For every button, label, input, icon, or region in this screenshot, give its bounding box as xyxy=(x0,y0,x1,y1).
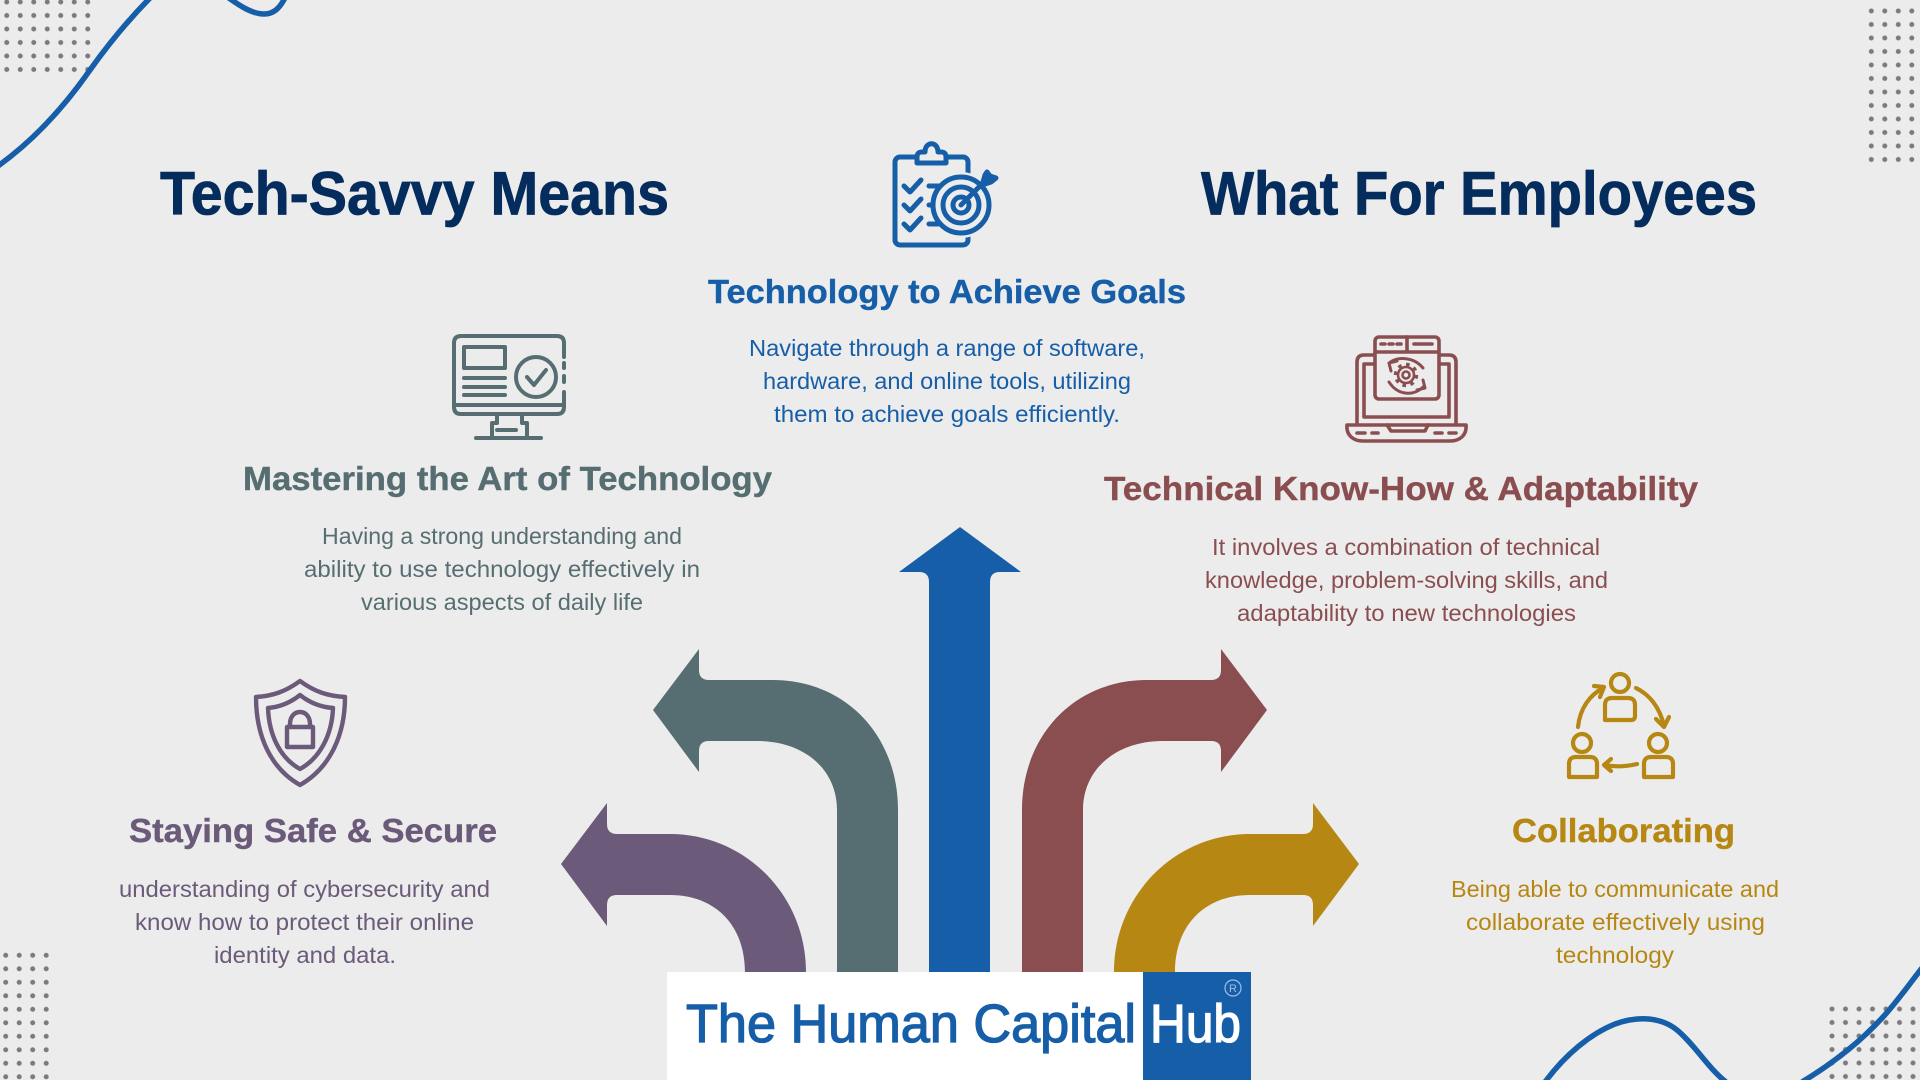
text: technical description: knowledge, problem-solving skills, and xyxy=(1205,567,1608,593)
text: technical description: adaptability to new technologies xyxy=(1237,600,1576,626)
icon: clipboard with target xyxy=(895,144,996,245)
text: mastering description: Having a strong understanding and xyxy=(322,523,682,549)
icon: shield with padlock xyxy=(256,681,345,785)
logo: The Human Capital Hub xyxy=(667,972,1251,1080)
heading: staying safe and secure: Staying Safe & Secure xyxy=(129,813,497,850)
arrow: purple left xyxy=(561,803,806,972)
title right: What For Employees xyxy=(1201,160,1757,228)
arrow: red right xyxy=(1022,649,1267,972)
logo: The Human Capital Hub: Hub xyxy=(1150,994,1241,1054)
text: security description xyxy=(119,876,490,968)
text: collaborating description: technology xyxy=(1556,942,1675,968)
panel: staying safe and secure xyxy=(119,813,497,968)
text: mastering description: various aspects of daily life xyxy=(361,589,643,615)
icon: monitor with check xyxy=(454,336,564,438)
decoration: bottom-right dots xyxy=(1825,1002,1920,1080)
logo: The Human Capital Hub: R xyxy=(1229,983,1237,995)
text: collaborating description: Being able to communicate and xyxy=(1451,876,1779,902)
heading: collaborating: Collaborating xyxy=(1512,813,1735,850)
text: technical description: It involves a combination of technical xyxy=(1212,534,1600,560)
heading: technology to achieve goals: Technology to Achieve Goals xyxy=(708,274,1186,311)
text: technology description: them to achieve goals efficiently. xyxy=(774,401,1120,427)
logo: The Human Capital Hub: The Human Capital xyxy=(686,994,1136,1054)
decoration: top-left dots xyxy=(0,0,94,76)
arrow: gold right xyxy=(1114,803,1359,972)
text: collaborating description xyxy=(1451,876,1779,968)
panel: collaborating xyxy=(1451,813,1779,968)
text: mastering description: ability to use technology effectively in xyxy=(304,556,700,582)
panel: technical know-how and adaptability xyxy=(1104,471,1698,626)
text: mastering description xyxy=(304,523,700,615)
panel: technology to achieve goals xyxy=(708,274,1186,427)
text: security description: understanding of cybersecurity and xyxy=(119,876,490,902)
decoration: bottom-right curves xyxy=(1545,968,1920,1080)
panel: mastering the art of technology xyxy=(243,461,772,615)
decoration: top-right dots xyxy=(1865,4,1919,166)
heading: mastering the art of technology: Mastering the Art of Technology xyxy=(243,461,772,498)
icon: team collaboration cycle xyxy=(1569,674,1673,777)
title left: Tech-Savvy Means xyxy=(160,160,669,228)
icon: laptop with gear xyxy=(1347,337,1466,441)
arrow: blue up xyxy=(899,527,1021,972)
text: technology description: hardware, and online tools, utilizing xyxy=(763,368,1131,394)
text: security description: identity and data. xyxy=(214,942,396,968)
text: technology description: Navigate through a range of software, xyxy=(749,335,1145,361)
text: technology description xyxy=(749,335,1145,427)
decoration: bottom-left dots xyxy=(0,949,53,1080)
decoration: top-left curve xyxy=(0,0,286,166)
text: technical description xyxy=(1205,534,1608,626)
arrow: green left xyxy=(653,649,898,972)
heading: technical know-how and adaptability: Technical Know-How & Adaptability xyxy=(1104,471,1698,508)
text: collaborating description: collaborate effectively using xyxy=(1466,909,1765,935)
text: security description: know how to protect their online xyxy=(135,909,474,935)
